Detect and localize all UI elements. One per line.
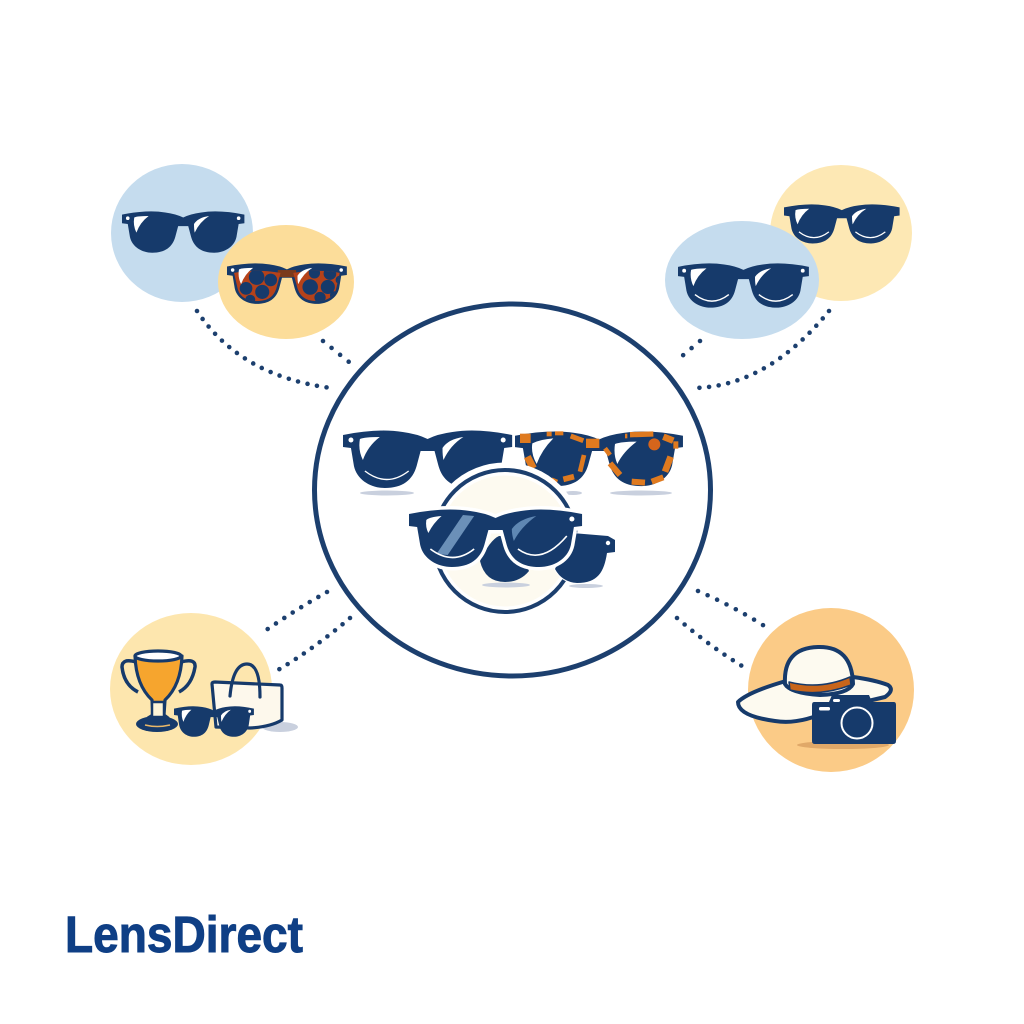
navy sunglasses on blue [678,263,809,308]
icon group: trophy, sunglasses and bag [110,613,298,765]
frame and lenses [343,431,512,488]
small central medallion circle [433,469,577,613]
shopping bag [212,664,282,728]
blue circle [111,164,253,302]
rear lens: right [555,533,615,583]
blue blob [665,221,819,339]
icon group: hat and camera [738,608,914,772]
yellow circle [110,613,272,765]
medallion ring [434,470,576,612]
tortoise frame [515,432,683,486]
shadows [564,490,672,496]
icon group: top right sunglasses [665,165,912,339]
central sunglasses: navy [343,431,512,496]
central sunglasses: tortoise [515,432,683,496]
tortoise sunglasses [227,263,347,305]
dotted connector: bottom right outer [698,591,766,627]
pale yellow circle [770,165,912,301]
yellow blob [218,225,354,339]
front sunglasses [409,510,582,567]
shadows [482,582,603,588]
white lens highlights [532,438,637,464]
shadow [360,490,414,496]
dotted connector: top right inner [675,341,700,362]
shadow [262,722,298,732]
logo wordmark: LensDirect [65,906,303,963]
dotted connector: bottom left outer [262,592,327,633]
medallion sunglasses cluster [409,510,615,588]
small sunglasses [174,706,254,737]
icon group: top left sunglasses [111,164,354,339]
orange circle [748,608,914,772]
dotted connector: top left inner [323,341,349,362]
dotted connector: bottom right inner [677,618,742,666]
navy sunglasses [122,211,244,253]
trophy [122,651,195,732]
large central circle [314,304,710,676]
dotted connector: top left outer [197,311,331,388]
orange tortoise patches [520,433,678,483]
camera [797,695,896,749]
dotted connector: bottom left inner [278,618,350,670]
navy sunglasses on yellow [784,204,900,243]
sun hat [738,647,891,722]
dotted connector: top right outer [695,311,829,388]
rear lens: centre [480,536,529,582]
